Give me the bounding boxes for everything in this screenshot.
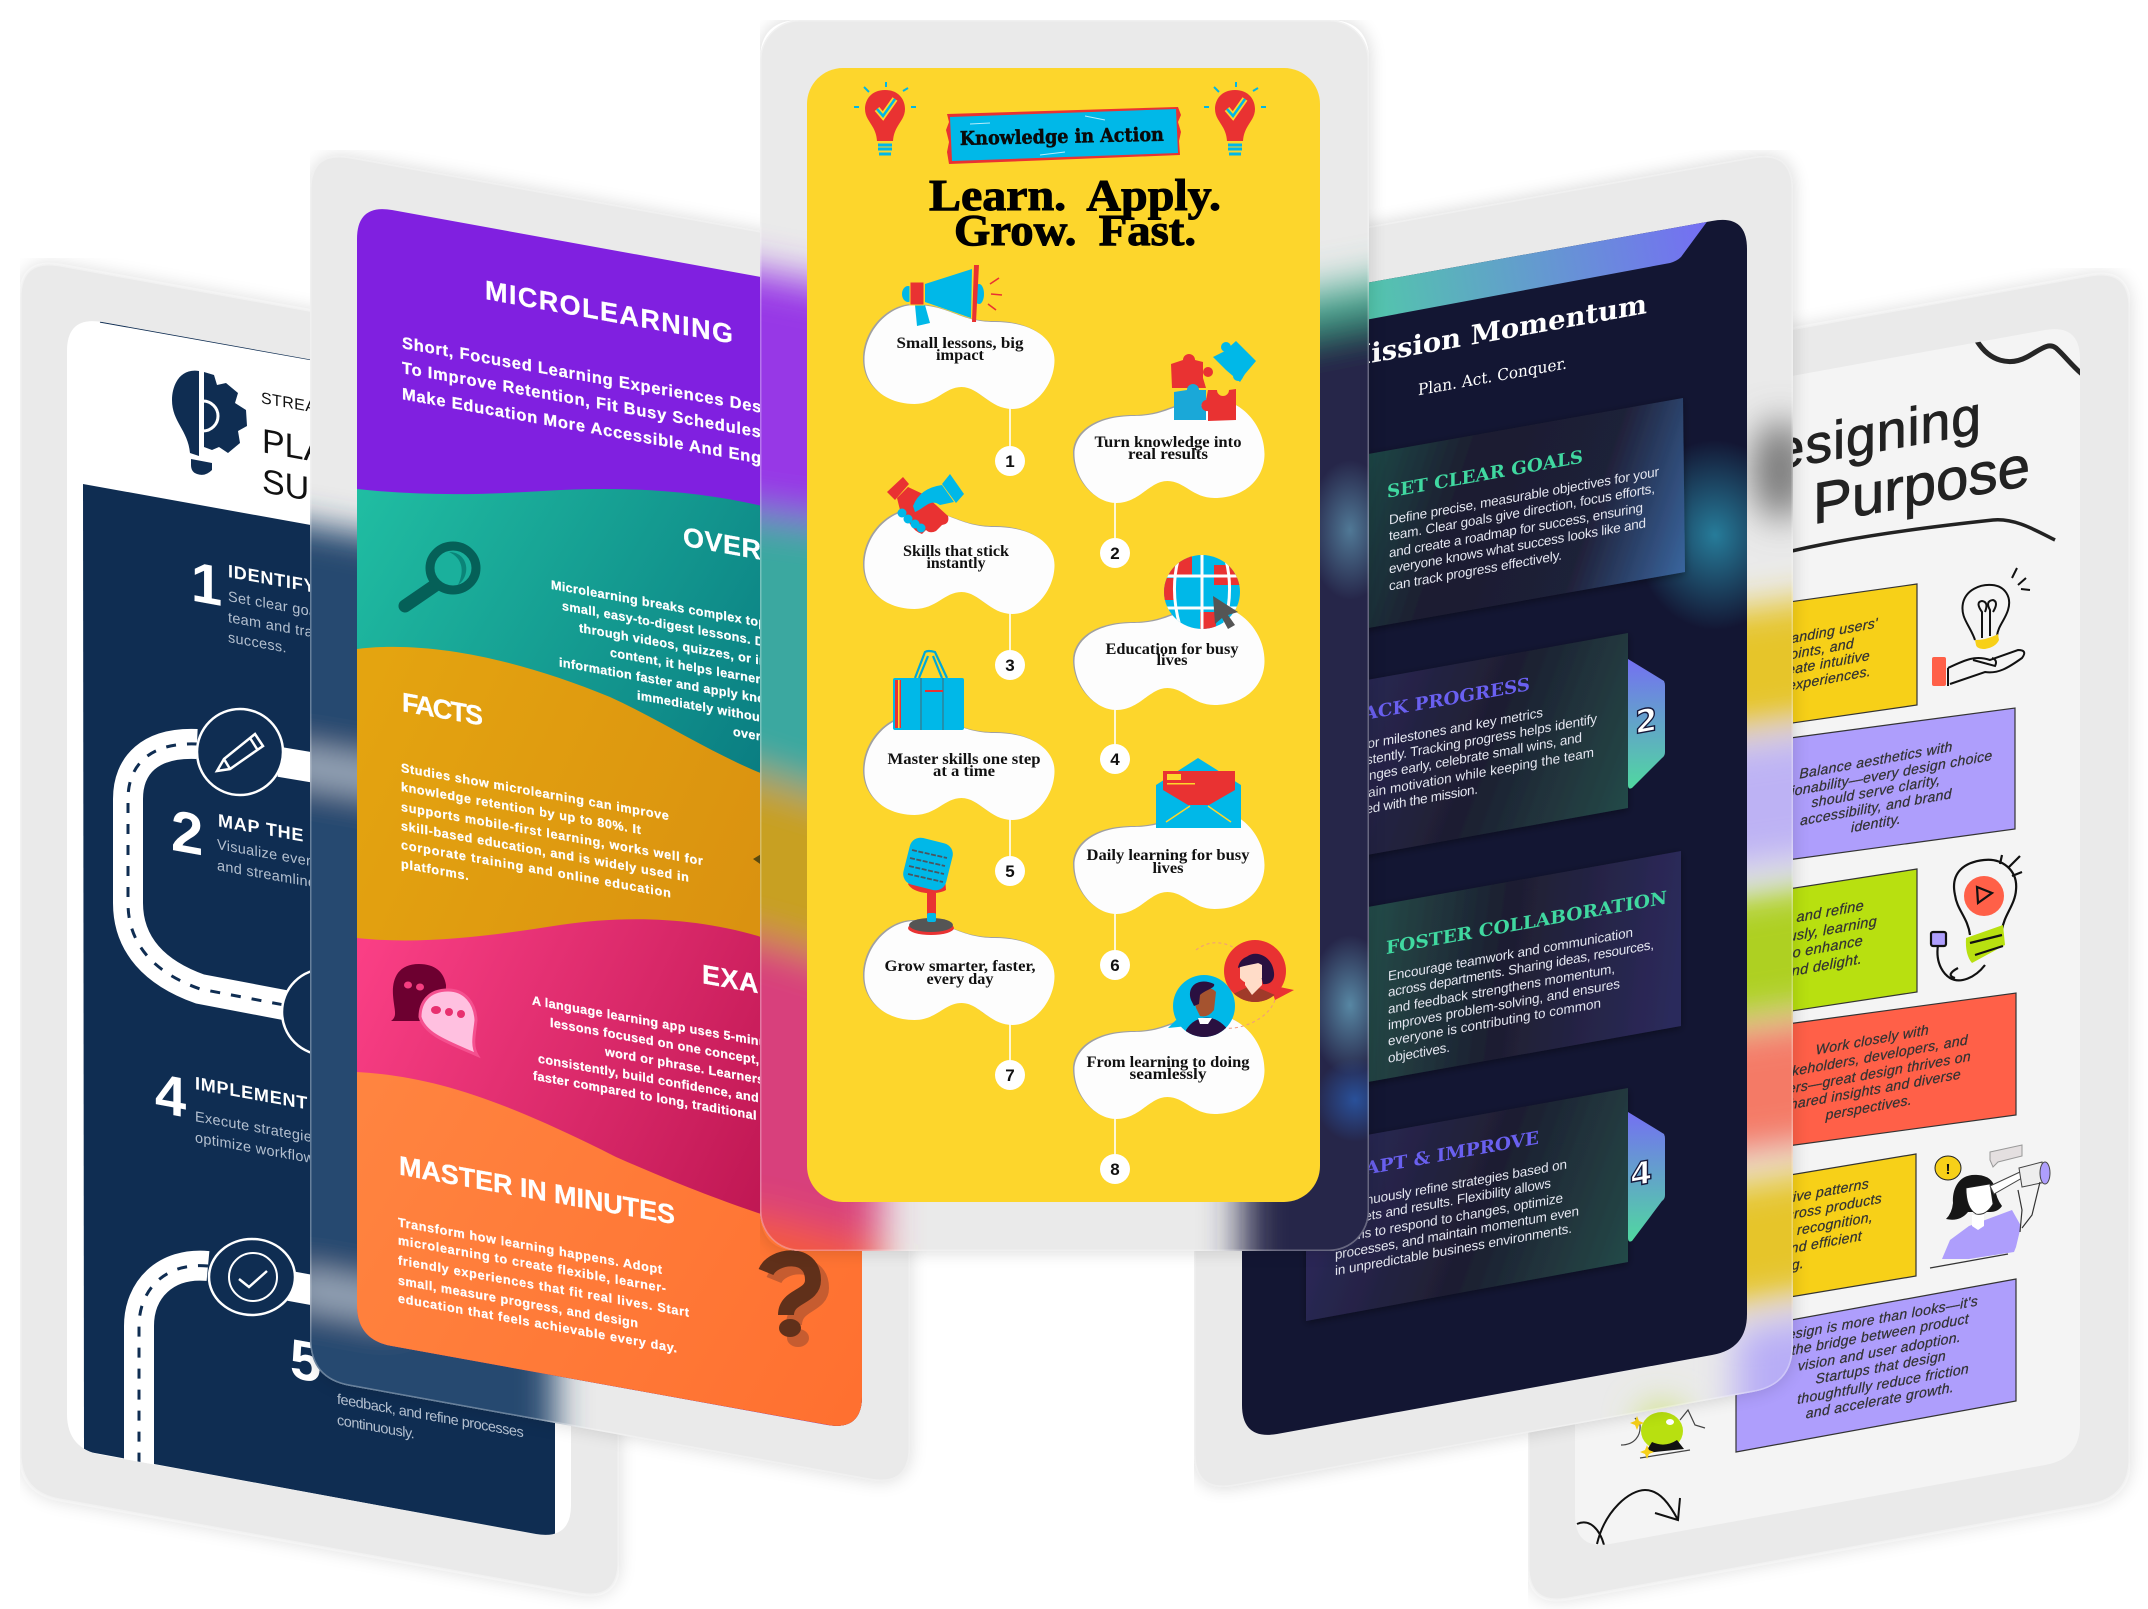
microlearning texts bbox=[398, 259, 836, 1384]
navy content area bbox=[83, 484, 555, 1538]
glass frame: left card bbox=[20, 264, 619, 1595]
heading: mission momentum bbox=[1341, 288, 1647, 413]
box 1: set clear goals: team. Clear goals give direction, focus efforts, bbox=[1389, 481, 1655, 544]
steps text: 2 bbox=[171, 798, 203, 868]
microlearning texts: small, easy-to-digest lessons. Delivered bbox=[562, 599, 815, 658]
gradient ribbon bbox=[1242, 219, 1709, 343]
microlearning texts: Microlearning breaks complex topics into bbox=[551, 578, 813, 639]
box texts: perspectives. bbox=[1825, 1091, 1912, 1123]
blob 7 bbox=[863, 920, 1054, 1025]
box texts: shared insights and diverse bbox=[1783, 1066, 1961, 1114]
blob 2: real results bbox=[1128, 446, 1208, 463]
box texts: Work closely with bbox=[1816, 1021, 1929, 1058]
numbered badges: 4 bbox=[1110, 750, 1120, 769]
numbered badges: 1 bbox=[1005, 452, 1015, 471]
box 2: track progress: maintain motivation while keeping the team bbox=[1335, 745, 1594, 806]
blob 5: Master skills one step bbox=[888, 751, 1040, 768]
box 1: set clear goals: and create a roadmap for success, ensuring bbox=[1389, 500, 1643, 561]
box 2: track progress bbox=[1306, 633, 1665, 866]
banner: knowledge in action: Knowledge in Action bbox=[960, 124, 1164, 150]
icon: two people chat bbox=[1168, 940, 1294, 1040]
heading: plan for success: PLAN FOR bbox=[262, 422, 432, 491]
box 3: foster collaboration: objectives. bbox=[1388, 1040, 1450, 1066]
box 4: adapt and improve: ADAPT & IMPROVE bbox=[1334, 1128, 1539, 1185]
steps text: 1 bbox=[191, 550, 222, 618]
box 2: track progress: Monitor milestones and key metrics bbox=[1335, 705, 1543, 757]
blob 6: lives bbox=[1152, 860, 1184, 877]
blob 3: instantly bbox=[926, 555, 986, 572]
box texts: for recognition, bbox=[1776, 1208, 1873, 1242]
box texts: learning. bbox=[1748, 1255, 1804, 1281]
steps text: Visualize every step bbox=[217, 837, 352, 877]
icon: bulb on hand bbox=[1948, 568, 2030, 686]
box 3: foster collaboration: and feedback strengthens momentum, bbox=[1388, 961, 1615, 1017]
steps text bbox=[155, 543, 524, 1462]
steps text: Set clear goals, align your bbox=[228, 589, 403, 636]
box texts: continuously, learning bbox=[1731, 914, 1877, 956]
microlearning texts: lessons focused on one concept, like a bbox=[550, 1016, 797, 1074]
box 3: foster collaboration: improves problem-solving, and ensures bbox=[1388, 976, 1620, 1033]
microlearning texts: small, measure progress, and design bbox=[398, 1273, 638, 1331]
title: designing with purpose: Purpose bbox=[1813, 434, 2030, 537]
steps text: 4 bbox=[155, 1061, 187, 1130]
band: overview bbox=[357, 489, 862, 1431]
heading: plan for success bbox=[262, 392, 310, 499]
box 2: track progress: focused with the mission. bbox=[1335, 782, 1478, 822]
blob 1 bbox=[863, 304, 1054, 409]
box 1: set clear goals: Define precise, measurable objectives for your bbox=[1389, 464, 1659, 528]
blob 8 bbox=[1073, 1014, 1264, 1119]
box texts: stakeholders, developers, and bbox=[1773, 1031, 1969, 1082]
box texts: needs, pain points, and bbox=[1702, 635, 1855, 678]
box 3: foster collaboration bbox=[1340, 851, 1681, 1087]
road with checkpoints bbox=[113, 708, 310, 1464]
blob 5 bbox=[863, 715, 1054, 820]
blob 2: Turn knowledge into bbox=[1094, 434, 1242, 451]
microlearning texts: corporate training and online education bbox=[401, 838, 671, 900]
microlearning texts: consistently, build confidence, and learn bbox=[538, 1052, 795, 1112]
glass frame: mission momentum card bbox=[1194, 156, 1793, 1487]
box 3: foster collaboration: across departments. Sharing ideas, resources, bbox=[1388, 937, 1654, 1000]
numbered badges: 3 bbox=[1005, 656, 1015, 675]
microlearning texts: MASTER IN MINUTES bbox=[399, 1150, 675, 1230]
microlearning texts: EXAMPLE bbox=[702, 958, 836, 1013]
steps text: team and track bbox=[228, 610, 328, 644]
box texts: Balance aesthetics with bbox=[1799, 738, 1953, 782]
blob 7: every day bbox=[926, 971, 994, 988]
panel: mission momentum card bbox=[1242, 220, 1747, 1435]
icon: handshake bbox=[887, 474, 964, 534]
microlearning texts: education that feels achievable every day. bbox=[398, 1291, 677, 1356]
steps text: success. bbox=[228, 630, 287, 657]
box texts: identity. bbox=[1851, 810, 1901, 835]
glass frame: right card bbox=[1528, 274, 2130, 1600]
box 4: adapt and improve: teams to respond to changes, optimize bbox=[1335, 1190, 1563, 1246]
title underline bbox=[1793, 518, 2056, 552]
box 3: foster collaboration: Encourage teamwork and communication bbox=[1388, 925, 1633, 984]
heading: mission momentum: Plan. Act. Conquer. bbox=[1418, 354, 1567, 399]
microlearning texts: immediately without feeling bbox=[637, 688, 811, 734]
box 4: adapt and improve: in unpredictable business environments. bbox=[1335, 1221, 1572, 1278]
box 2: track progress: consistently. Tracking progress helps identify bbox=[1335, 711, 1597, 773]
microlearning texts: To Improve Retention, Fit Busy Schedules, And bbox=[402, 358, 806, 450]
box texts: Design is more than looks—it's bbox=[1777, 1293, 1978, 1345]
microlearning texts: MICROLEARNING bbox=[485, 274, 733, 350]
box 2: track progress: TRACK PROGRESS bbox=[1335, 674, 1530, 730]
microlearning texts: FACTS bbox=[402, 686, 483, 732]
icon: chat bubbles bbox=[391, 964, 477, 1055]
microlearning texts: Short, Focused Learning Experiences Designed bbox=[402, 333, 810, 425]
glass frame: microlearning card bbox=[310, 156, 910, 1481]
icon: bag bbox=[893, 651, 964, 730]
box 2: track progress: challenges early, celebrate small wins, and bbox=[1335, 730, 1582, 789]
squiggle decoration bbox=[1977, 341, 2082, 374]
title: designing with purpose bbox=[1793, 404, 2028, 524]
numbered badges: 5 bbox=[1005, 862, 1015, 881]
box 2: track progress: 2 bbox=[1635, 700, 1657, 742]
microlearning texts: A language learning app uses 5-minute bbox=[532, 994, 779, 1052]
panel: knowledge in action card bbox=[807, 68, 1320, 1202]
box 1: set clear goals: can track progress effectively. bbox=[1389, 547, 1562, 594]
box texts: usability and delight. bbox=[1724, 951, 1862, 992]
numbered badges: 2 bbox=[1110, 544, 1120, 563]
microlearning texts: content, it helps learners absorb bbox=[610, 646, 816, 697]
box 4: adapt and improve: processes, and maintain momentum even bbox=[1335, 1203, 1579, 1262]
box texts: should serve clarity, bbox=[1812, 771, 1940, 810]
steps text: Execute strategies and bbox=[195, 1109, 349, 1153]
title: Grow. Fast. bbox=[954, 206, 1196, 255]
microlearning texts: friendly experiences that fit real lives. Start bbox=[398, 1253, 690, 1320]
banner: knowledge in action bbox=[946, 107, 1181, 164]
icon: megaphone bbox=[902, 265, 1002, 326]
box texts: functionability—every design choice bbox=[1759, 747, 1993, 805]
box texts: and accelerate growth. bbox=[1806, 1379, 1954, 1421]
icon: girl with telescope bbox=[1930, 1145, 2050, 1268]
box 4: adapt and improve: Continuously refine strategies based on bbox=[1335, 1157, 1567, 1213]
icon: light bulb right bbox=[1204, 82, 1266, 154]
icon: light bulb left bbox=[854, 82, 916, 154]
steps text: optimize workflow steps bbox=[195, 1130, 355, 1175]
box 1: set clear goals bbox=[1340, 398, 1685, 633]
band: facts bbox=[357, 647, 862, 1431]
microlearning texts: Studies show microlearning can improve bbox=[401, 761, 669, 823]
title: Learn. Apply. bbox=[929, 171, 1221, 220]
box texts: the bridge between product bbox=[1792, 1310, 1970, 1358]
title bbox=[929, 171, 1221, 255]
microlearning texts: Transform how learning happens. Adopt bbox=[398, 1215, 663, 1277]
blob 8: seamlessly bbox=[1130, 1066, 1207, 1083]
box texts: Use repetitive patterns bbox=[1722, 1175, 1869, 1218]
microlearning texts: microlearning to create flexible, learner- bbox=[398, 1233, 666, 1296]
box texts: experiences. bbox=[1788, 663, 1871, 694]
steps text: 5 bbox=[290, 1327, 321, 1395]
blob 7: Grow smarter, faster, bbox=[884, 958, 1036, 975]
microlearning texts: information faster and apply knowledge bbox=[559, 655, 810, 715]
microlearning texts: skill-based education, and is widely used in bbox=[401, 819, 689, 885]
icon: girl with telescope: ! bbox=[1946, 1161, 1950, 1178]
box texts: Startups that design bbox=[1816, 1347, 1946, 1387]
numbered badges: 7 bbox=[1005, 1066, 1015, 1085]
panel: designing with purpose card bbox=[1575, 330, 2080, 1545]
microlearning texts: Make Education More Accessible And Engaging bbox=[402, 384, 810, 476]
blob 4 bbox=[1073, 605, 1264, 710]
blob 3 bbox=[863, 509, 1054, 614]
box texts: accessibility, and brand bbox=[1800, 785, 1953, 828]
box 1: set clear goals: SET CLEAR GOALS bbox=[1387, 447, 1583, 503]
icon: curved arrow bbox=[1577, 1490, 1680, 1545]
box texts: across products bbox=[1779, 1190, 1882, 1224]
steps text: continuously. bbox=[337, 1413, 415, 1443]
panel: plan for success card bbox=[67, 321, 571, 1535]
steps text: MAP THE WORKFLOW bbox=[218, 810, 426, 868]
box 4: adapt and improve bbox=[1306, 1088, 1665, 1321]
box texts: and efficient bbox=[1783, 1227, 1863, 1258]
microlearning texts: OVERVIEW bbox=[683, 521, 832, 578]
numbered badges bbox=[995, 446, 1130, 1184]
box texts: vision and user adoption. bbox=[1798, 1329, 1961, 1374]
panel: microlearning card bbox=[357, 209, 862, 1426]
icon: puzzle pieces bbox=[1171, 341, 1256, 421]
band: master in minutes bbox=[357, 1072, 862, 1431]
microlearning texts: word or phrase. Learners progress bbox=[604, 1045, 825, 1098]
icon: envelope bbox=[1156, 758, 1241, 828]
blob 3: Skills that stick bbox=[903, 543, 1009, 560]
steps text: IMPLEMENT SOLUTIONS bbox=[195, 1073, 426, 1135]
blob 4: lives bbox=[1156, 652, 1188, 669]
steps text: feedback, and refine processes bbox=[337, 1392, 524, 1441]
heading: plan for success: SUCCESS bbox=[262, 462, 426, 530]
steps text: and streamline bbox=[217, 858, 316, 892]
heading: plan for success: STREAMLINE YOUR bbox=[261, 389, 419, 435]
microlearning texts: through videos, quizzes, or interactive bbox=[579, 621, 822, 679]
steps text: IDENTIFY GOALS bbox=[228, 561, 390, 610]
numbered badges: 6 bbox=[1110, 956, 1120, 975]
coloured text boxes bbox=[1735, 583, 2017, 1453]
blob 6 bbox=[1073, 809, 1264, 914]
box 4: adapt and improve: markets and results. Flexibility allows bbox=[1335, 1175, 1551, 1229]
microlearning texts: overwhelmed. bbox=[733, 725, 821, 755]
box texts: thoughtfully reduce friction bbox=[1797, 1360, 1969, 1407]
icon: microphone bbox=[901, 835, 955, 935]
blob 1: Small lessons, big bbox=[896, 335, 1024, 352]
microlearning texts: platforms. bbox=[401, 857, 469, 883]
blob 8: From learning to doing bbox=[1086, 1054, 1250, 1071]
icon: bulb and gear logo bbox=[172, 369, 247, 475]
connector lines bbox=[1010, 408, 1115, 1156]
heading: mission momentum: Mission Momentum bbox=[1341, 288, 1647, 375]
blob 4: Education for busy bbox=[1106, 641, 1239, 658]
glass frame: center card bbox=[760, 20, 1369, 1251]
microlearning texts: supports mobile-first learning, works well for bbox=[401, 800, 703, 868]
blob 2 bbox=[1073, 398, 1264, 503]
box 4: adapt and improve: 4 bbox=[1630, 1153, 1652, 1195]
numbered badges: 8 bbox=[1110, 1160, 1120, 1179]
title: designing with purpose: Designing bbox=[1735, 384, 1982, 489]
icon: crystal ball bbox=[1621, 1410, 1705, 1459]
blob 1: impact bbox=[936, 347, 985, 364]
blob 6: Daily learning for busy bbox=[1086, 847, 1250, 864]
box texts bbox=[1792, 618, 1992, 1418]
icon: bulb with play button bbox=[1931, 855, 2022, 980]
band: example bbox=[357, 919, 862, 1431]
box texts: behaviors to create intuitive bbox=[1691, 647, 1870, 695]
icon: globe and cursor bbox=[1164, 555, 1240, 634]
box texts: others—great design thrives on bbox=[1767, 1048, 1971, 1100]
icon: magnifier bbox=[405, 546, 476, 606]
blob 5: at a time bbox=[933, 763, 995, 780]
box texts: Test and refine bbox=[1764, 898, 1864, 932]
box 3: foster collaboration: everyone is contributing to common bbox=[1388, 995, 1601, 1049]
icon: question mark bbox=[766, 1258, 821, 1347]
box texts: from users to enhance bbox=[1712, 933, 1863, 976]
microlearning texts: faster compared to long, traditional courses. bbox=[533, 1069, 815, 1133]
box 3: foster collaboration: FOSTER COLLABORATION bbox=[1386, 888, 1667, 959]
box texts: Start by understanding users' bbox=[1688, 614, 1879, 665]
microlearning texts: knowledge retention by up to 80%. It bbox=[401, 780, 642, 837]
box 1: set clear goals: everyone knows what success looks like and bbox=[1389, 515, 1646, 577]
